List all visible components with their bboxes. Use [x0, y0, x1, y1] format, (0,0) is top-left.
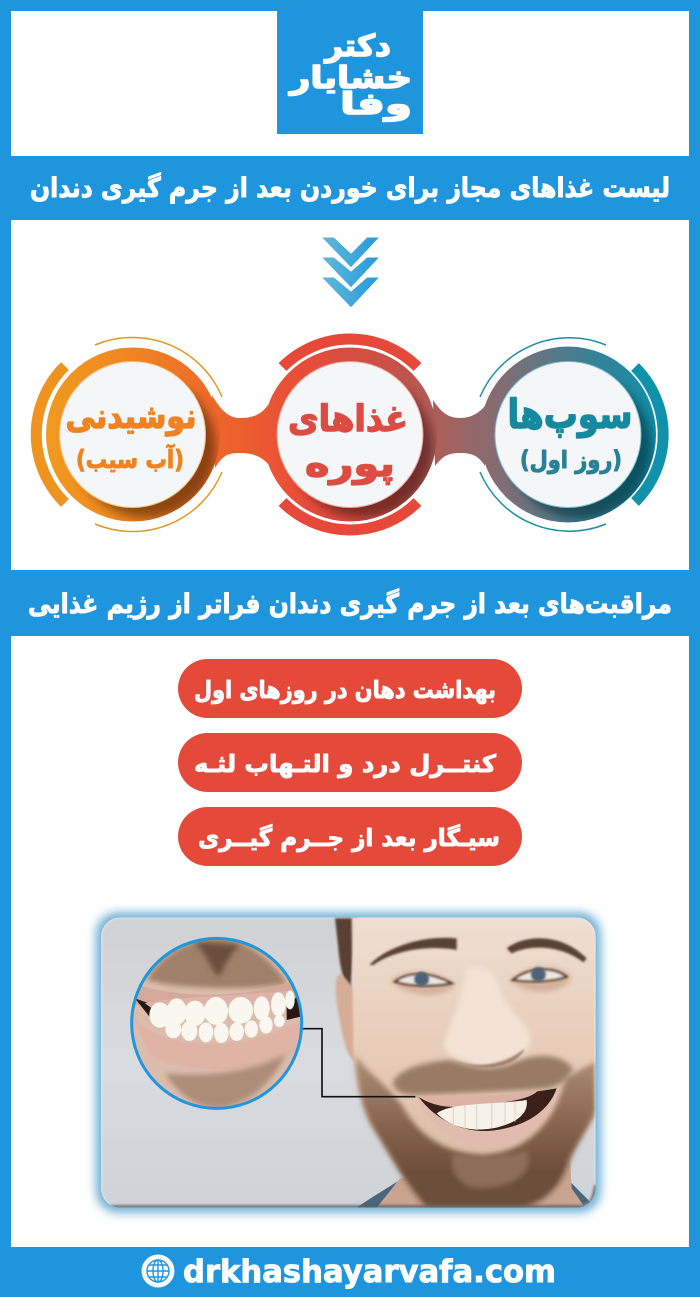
inset lower lip [138, 1024, 300, 1068]
thin arcs [95, 337, 222, 532]
neck [377, 1158, 583, 1208]
inset upper lip [135, 982, 298, 1005]
pill: pain and inflammation [178, 733, 522, 792]
circle: pureed foods: پوره [305, 444, 395, 485]
eye socket shading [390, 967, 572, 995]
inset mustache [147, 938, 287, 988]
panel: foods [11, 220, 689, 570]
mustache [393, 1056, 573, 1095]
circle: soups: سوپ‌ها [508, 392, 632, 438]
circle: pureed foods [277, 339, 423, 530]
pill: smoking: سیـگار بعد از جــرم گیــری [198, 824, 500, 852]
circle: pureed foods: غذاهای [288, 399, 408, 440]
icon: globe [142, 1254, 174, 1288]
icon: triple down chevrons [321, 237, 380, 308]
diagram: three connected food circles [36, 337, 663, 532]
upper lip [417, 1090, 538, 1107]
thick arc [36, 366, 65, 503]
beard [355, 1055, 596, 1208]
photo: smiling man with zoomed teeth inset [96, 912, 601, 1213]
inset gum [145, 990, 294, 1008]
inset chin beard [165, 1053, 287, 1108]
photo glow [96, 912, 601, 1213]
inset teeth [149, 991, 295, 1043]
panel: logo area [11, 11, 689, 156]
hair [335, 917, 358, 995]
teeth [437, 1100, 527, 1129]
eyes [395, 974, 452, 986]
logo: وفا [340, 87, 412, 122]
ring shadows [76, 378, 216, 518]
pill: pain and inflammation: کنتــرل درد و التـهاب لثـه [194, 750, 496, 778]
circle: soups [480, 338, 663, 531]
pill: oral hygiene: بهداشت دهان در روزهای اول [194, 676, 496, 704]
circle: drinks [36, 337, 222, 532]
pill: oral hygiene [178, 659, 522, 718]
face [352, 917, 596, 1208]
logo: خشایار [288, 61, 412, 96]
thin arcs [480, 338, 606, 531]
photo inner edge shading [101, 917, 596, 1208]
pill: smoking [178, 807, 522, 866]
connected ring band [46, 346, 656, 522]
thick arcs [282, 339, 418, 530]
chin patch [452, 1150, 529, 1188]
inset mouth dark corners [136, 998, 300, 1020]
mouth [418, 1088, 557, 1131]
bottom edge shadow [110, 1185, 596, 1207]
shirt [357, 1180, 596, 1208]
panel: care list and photo [11, 636, 689, 1247]
nose [443, 967, 531, 1067]
thick arc [635, 367, 663, 502]
ear [334, 973, 355, 1062]
logo: دکتر [323, 29, 391, 64]
brows [369, 938, 457, 965]
circle: soups: (روز اول) [520, 446, 622, 474]
inset: magnified teeth [130, 937, 303, 1110]
circle: drinks: نوشیدنی [66, 397, 196, 437]
circle: drinks: (آب سیب) [76, 444, 184, 474]
callout line [302, 1029, 415, 1097]
logo [277, 0, 423, 134]
footer website: drkhashayarvafa.com [183, 1254, 556, 1290]
lower lip [548, 1104, 549, 1105]
